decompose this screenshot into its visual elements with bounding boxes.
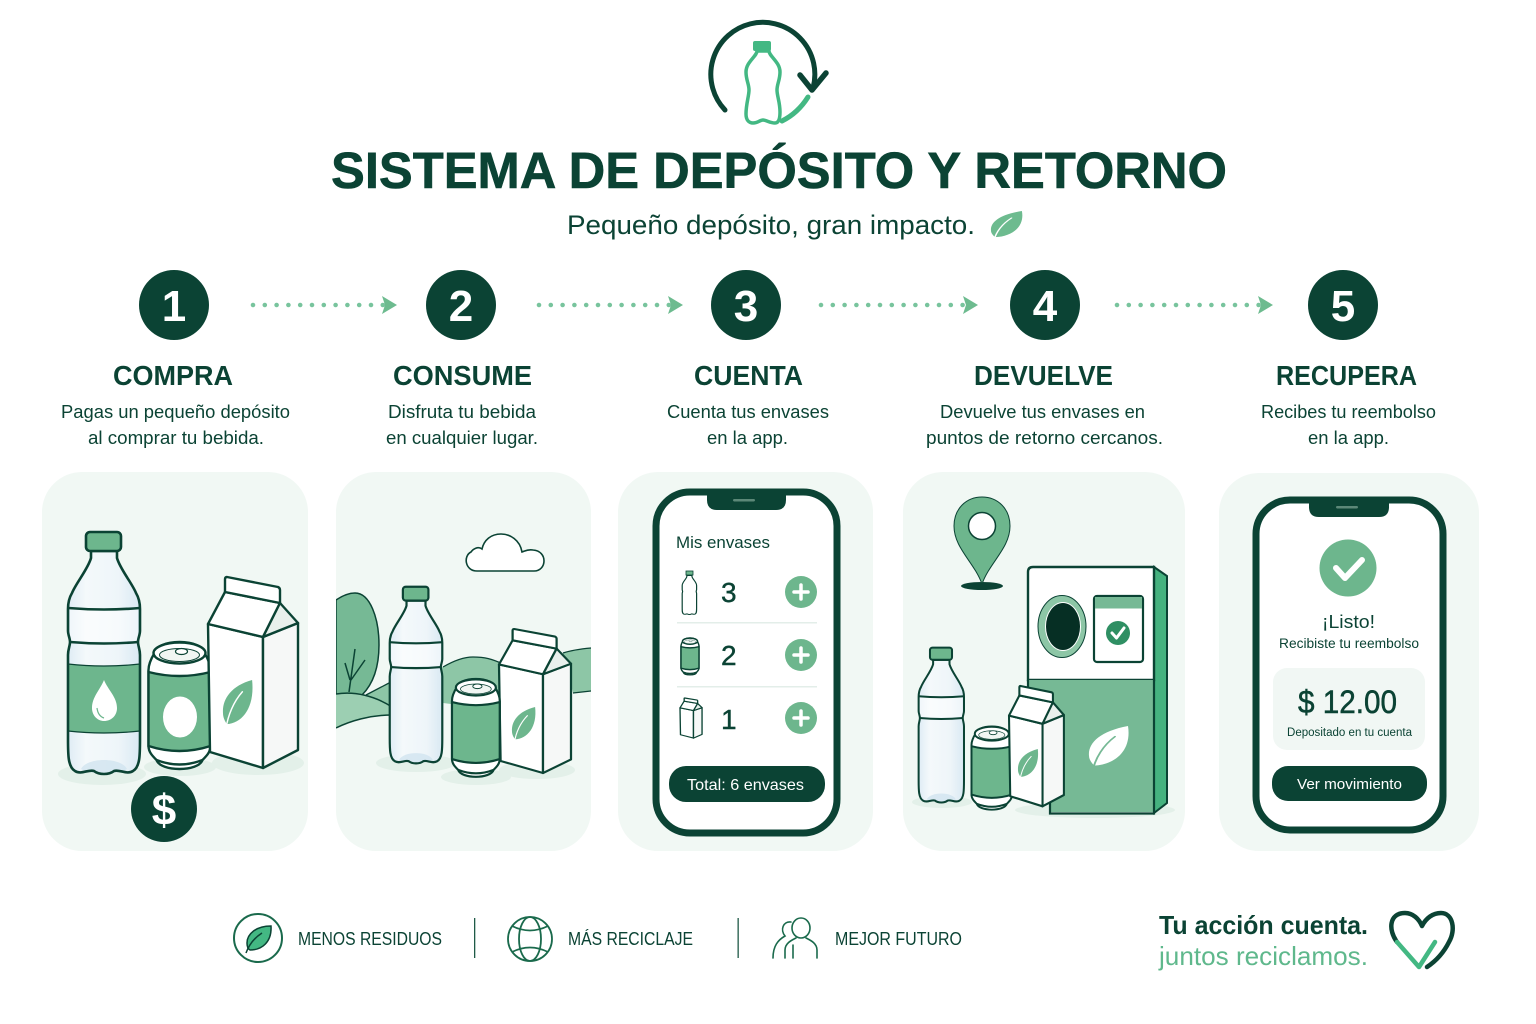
row: bottles: 3 [721,577,737,608]
row: cans [681,638,817,675]
button: ver movimiento: Ver movimiento [1297,777,1402,793]
bottle [919,648,964,803]
panel: compra [42,472,308,851]
step 2 heading: CONSUME [393,360,532,391]
closing message: Tu acción cuenta. [1159,910,1368,940]
phone [656,492,837,833]
arrow 4 to 5 [1117,296,1273,314]
button: total [669,766,825,802]
row: cans: 2 [721,640,737,671]
bottle [390,587,442,763]
closing message [1158,910,1368,971]
step 4 description [926,402,1163,448]
closing message: juntos reciclamos. [1158,941,1368,971]
row: cartons [680,698,817,738]
step 5 number [1308,270,1378,340]
step 2 number [426,270,496,340]
benefit: mejor futuro: MEJOR FUTURO [835,929,962,949]
coin [131,776,197,842]
step 4 description: puntos de retorno cercanos. [926,428,1163,448]
button: total: Total: 6 envases [687,777,804,794]
button: ver movimiento [1272,766,1427,801]
phone notch [1309,500,1389,517]
step 3 number: 3 [734,282,758,331]
step 2 description [386,402,538,448]
phone [1256,500,1443,830]
panel: consume [336,472,591,851]
step 2 description: en cualquier lugar. [386,428,538,448]
can [148,642,210,769]
bottle with label [68,532,140,774]
panel: devuelve [903,472,1185,851]
step 4 description: Devuelve tus envases en [940,402,1145,422]
step 1 heading: COMPRA [113,360,233,391]
step 5 description [1261,402,1436,448]
text: listo: ¡Listo! [1322,612,1375,632]
step 3 description: en la app. [707,428,788,448]
step 5 number: 5 [1331,282,1355,331]
amount card [1273,668,1425,750]
step 4 heading: DEVUELVE [974,360,1113,391]
icon: subtitle leaf [991,211,1022,240]
row: bottles [682,571,817,615]
text: recibiste: Recibiste tu reembolso [1279,636,1419,651]
header icon: bottle in return loop [711,22,826,123]
step 5 description: Recibes tu reembolso [1261,402,1436,422]
benefit: mas reciclaje [508,917,693,961]
step 3 description [667,402,829,448]
benefit: menos residuos: MENOS RESIDUOS [298,929,442,949]
panel: recupera [1219,473,1479,851]
panel: cuenta [618,472,873,851]
benefit: mejor futuro [773,918,962,958]
step 3 number [711,270,781,340]
subtitle: Pequeño depósito, gran impacto. [567,210,975,240]
arrow 3 to 4 [821,296,978,314]
row: cartons: 1 [721,704,737,735]
coin: $ [152,786,176,835]
benefit: menos residuos [234,914,442,962]
location pin [954,497,1010,590]
title: SISTEMA DE DEPÓSITO Y RETORNO [331,142,1227,199]
step 3 description: Cuenta tus envases [667,402,829,422]
return machine [1028,567,1167,814]
step 5 description: en la app. [1308,428,1389,448]
can [452,679,500,777]
step 2 description: Disfruta tu bebida [388,402,537,422]
icon: water drop [92,680,117,721]
amount card: $ 12.00 [1298,684,1397,720]
arrow 1 to 2 [253,296,397,314]
can [972,726,1012,810]
arrow 2 to 3 [539,296,683,314]
step 4 number: 4 [1033,282,1058,331]
heading: mis envases: Mis envases [676,533,770,552]
step 1 number: 1 [162,282,186,331]
step 1 description: Pagas un pequeño depósito [61,402,290,422]
step 1 description: al comprar tu bebida. [88,428,264,448]
check badge [1320,540,1376,596]
step 4 number [1010,270,1080,340]
step 3 heading: CUENTA [694,360,803,391]
carton [208,577,298,768]
amount card: Depositado en tu cuenta [1287,727,1413,739]
step 1 description [61,402,290,448]
phone notch [707,492,786,510]
icon: heart with check [1391,913,1453,967]
landscape [336,593,591,728]
carton [499,629,571,773]
step 5 heading: RECUPERA [1276,360,1417,391]
step 1 number [139,270,209,340]
cloud [466,534,544,571]
benefit: mas reciclaje: MÁS RECICLAJE [568,929,693,949]
carton [1009,686,1064,806]
step 2 number: 2 [449,282,473,331]
